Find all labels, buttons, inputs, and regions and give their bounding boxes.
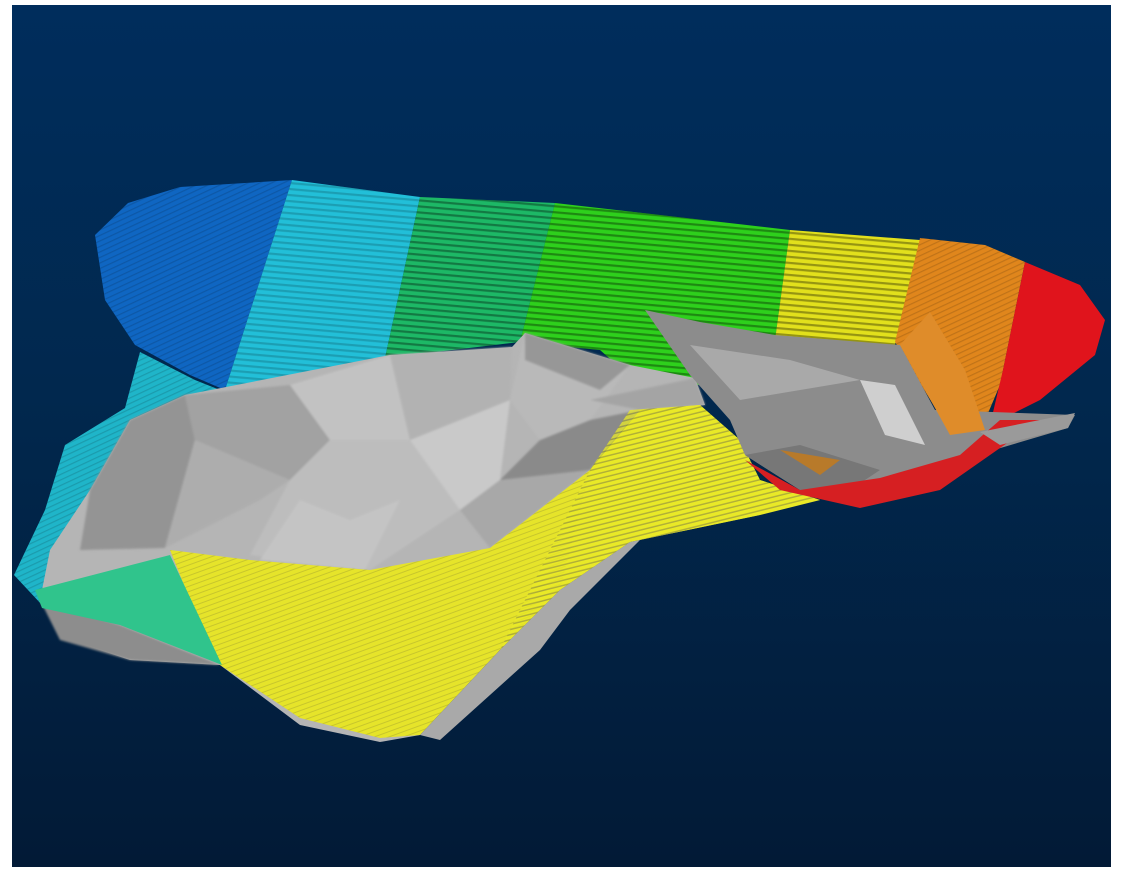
band: orange segment [895,238,1025,432]
mesh facets [40,333,705,665]
upper coloured band [95,180,1105,432]
band: teal green segment [385,197,555,358]
band: red tip [990,262,1105,425]
grey right mesh [645,310,1075,508]
band: cyan segment [225,180,420,390]
band: blue segment [95,180,292,390]
green translucent band [35,555,222,665]
grey mesh body [40,333,705,742]
band: yellow segment [775,230,920,345]
yellow lower band [170,405,820,740]
red lower wedge [745,420,1040,508]
cyan left lobe [14,352,225,605]
band: green segment [520,203,790,385]
